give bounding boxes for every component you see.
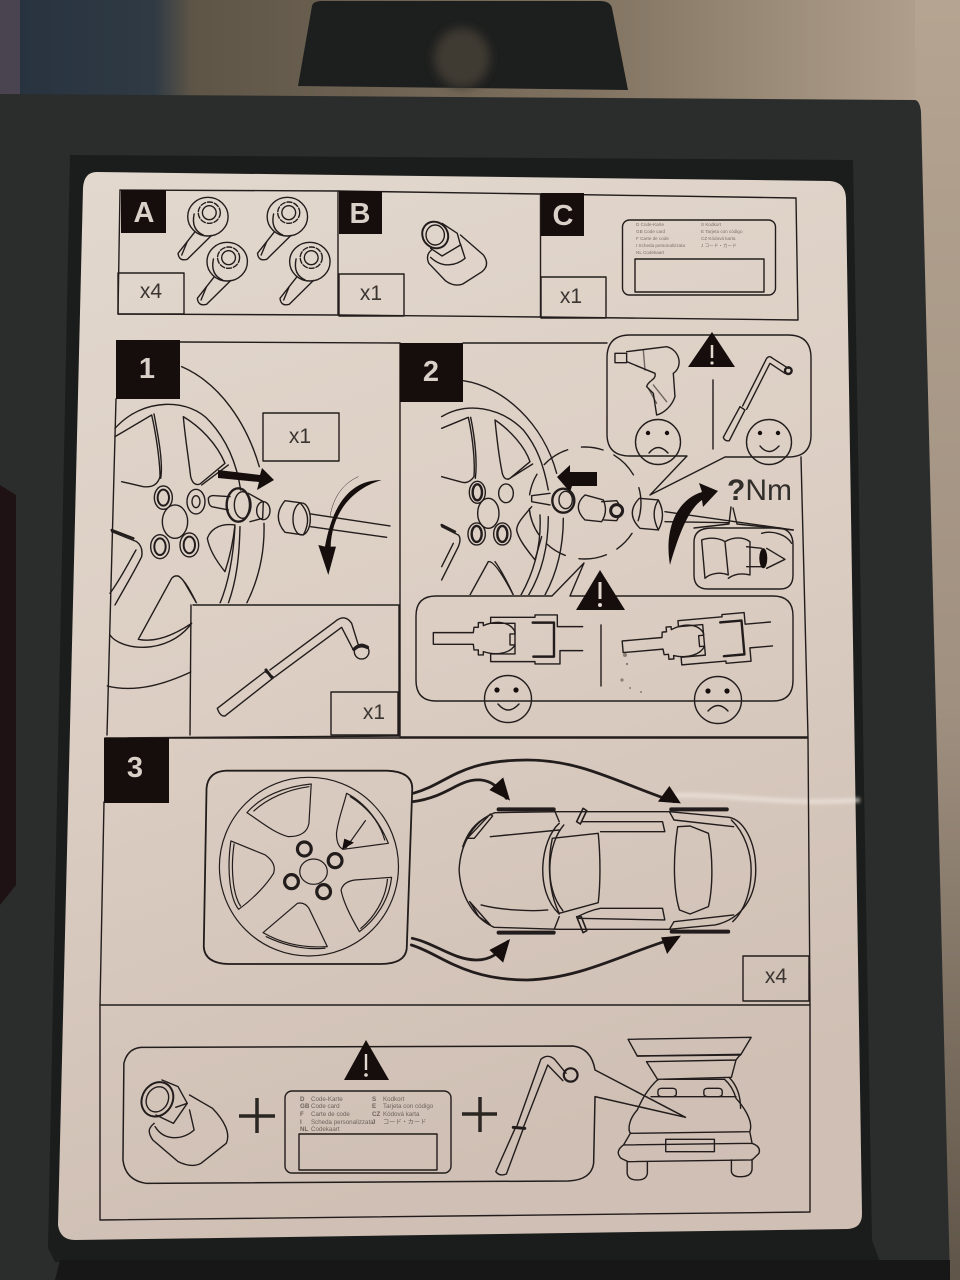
label B (339, 191, 382, 234)
quantity x1 (331, 692, 398, 735)
locking bolt being removed (208, 488, 270, 522)
zoom circle around bolt and socket (529, 447, 641, 559)
correct socket fit (433, 615, 583, 664)
bubble: use hand wrench, not impact gun (607, 332, 811, 495)
plus sign (462, 1097, 497, 1132)
code card: D Code-Karte (636, 222, 665, 227)
code card: E (372, 1103, 376, 1110)
bolts x4 (178, 197, 330, 305)
bubble with tail (123, 1046, 685, 1183)
instruction card (58, 172, 862, 1240)
warning triangle (688, 332, 735, 367)
bubble outline (694, 528, 793, 589)
panel: step 3 (100, 738, 810, 1005)
code card: Scheda personalizzata (311, 1119, 374, 1126)
label 3: 3 (127, 752, 143, 784)
panel frame lines (100, 738, 810, 1005)
crease marks on the card (665, 795, 860, 802)
code card: Carte de code (311, 1111, 350, 1118)
happy face (484, 676, 532, 722)
car seen from above (459, 808, 756, 933)
code card: S (372, 1096, 376, 1103)
quantity x4 (118, 273, 184, 314)
quantity x4: x4 (140, 280, 162, 303)
panel frame lines (105, 342, 400, 738)
inset frame (190, 605, 399, 735)
label B: B (350, 198, 370, 230)
code card: Kodkort (383, 1096, 405, 1103)
panel frame lines (400, 343, 808, 737)
bubble: read the manual (694, 528, 793, 589)
icon: wrench (496, 1056, 578, 1175)
code card: D (300, 1096, 305, 1103)
code card: Code card (311, 1103, 340, 1110)
code card: I Scheda personalizzata (636, 243, 685, 248)
icon: wrench (217, 618, 369, 716)
plus sign (239, 1098, 275, 1133)
arrows to the four wheels (411, 760, 681, 980)
code card (622, 220, 776, 295)
code card: Codekaart (311, 1126, 340, 1133)
sad face (636, 420, 680, 464)
bubble outline with tail (416, 563, 793, 701)
quantity x1 (541, 277, 606, 318)
quantity x1: x1 (360, 282, 382, 305)
code card: Tarjeta con código (383, 1103, 434, 1110)
bolt, socket and wrench (532, 489, 793, 530)
panel: step 2 (400, 332, 811, 737)
quantity x1 (263, 413, 339, 461)
warning triangle (576, 570, 625, 610)
panel frame lines (100, 1005, 810, 1220)
panel: step 1 (105, 340, 400, 738)
divider (600, 625, 602, 686)
wheel (107, 367, 264, 688)
wheel (442, 381, 563, 596)
arrow: pull direction (218, 468, 274, 490)
label 3 (104, 738, 169, 803)
panel frame lines (118, 190, 798, 320)
label 1: 1 (139, 353, 155, 385)
icon: open book and eye (702, 532, 792, 578)
code card: GB (300, 1103, 310, 1110)
illustrated instructions (100, 190, 811, 1220)
code card: Kódová karta (383, 1111, 420, 1118)
connector from torque label (694, 507, 793, 530)
arrow: insertion direction (557, 465, 597, 492)
warning triangle (344, 1040, 389, 1080)
code card: J コード・カード (701, 243, 737, 249)
socket on wrench (278, 501, 390, 537)
arrow: turn direction (318, 477, 382, 575)
quantity x4 (743, 956, 809, 1001)
quantity x1: x1 (560, 285, 582, 308)
icon: impact gun (615, 347, 679, 415)
hanger tab of the case (298, 1, 628, 90)
code card: コード・カード (383, 1119, 426, 1126)
bubble: correct and wrong socket seating (416, 563, 793, 724)
panel: storage in the car boot (100, 1005, 810, 1220)
icon: key socket (138, 1080, 228, 1165)
code card: F (300, 1111, 304, 1118)
quantity x1 (339, 274, 404, 316)
label C (541, 193, 584, 236)
inset: wheel wrench (190, 605, 399, 735)
print smudge (620, 653, 642, 693)
code card: Code-Karte (311, 1096, 343, 1103)
bubble outline with tail (607, 335, 811, 495)
key socket (420, 220, 487, 285)
code card: J (372, 1119, 376, 1126)
label 1 (116, 340, 180, 399)
code card: CZ Kódová karta (701, 236, 736, 241)
code card: E Tarjeta con código (701, 229, 743, 234)
label A (121, 190, 166, 233)
torque label: ?Nm (727, 474, 792, 507)
icon: wrench (723, 357, 792, 441)
quantity x1: x1 (363, 701, 385, 724)
code card: NL (300, 1126, 308, 1133)
incorrect socket fit (621, 610, 774, 672)
code card: I (300, 1119, 302, 1126)
icon: car with open boot (618, 1037, 759, 1180)
code card: F Carte de code (636, 236, 669, 241)
code card: GB Code card (636, 229, 666, 234)
code card: S Kodkort (701, 222, 722, 227)
code card: NL Codekaart (636, 250, 665, 255)
happy face (746, 420, 792, 464)
label 2 (400, 343, 463, 402)
sad face (694, 676, 742, 724)
code card (285, 1091, 451, 1173)
code card: CZ (372, 1111, 380, 1118)
divider (712, 380, 714, 449)
arrow: tighten direction (668, 483, 718, 565)
label 2: 2 (423, 356, 439, 388)
quantity x4: x4 (765, 965, 787, 988)
label C: C (553, 200, 574, 232)
quantity x1: x1 (289, 425, 311, 448)
panel: contents A B C (118, 190, 798, 320)
bubble: wheel with bolts (204, 771, 412, 964)
label A: A (134, 197, 155, 229)
